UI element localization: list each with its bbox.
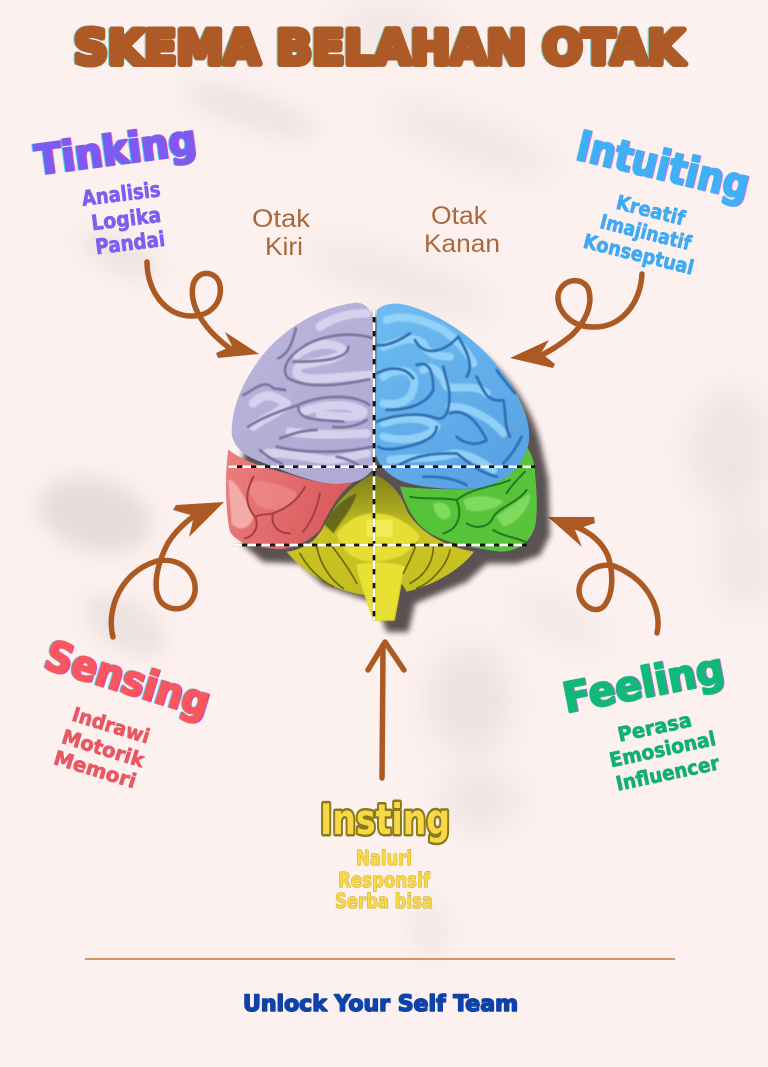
label: Otak Kanan: Otak — [431, 202, 488, 230]
list: Sensing traits: Memori — [51, 745, 139, 793]
list: Sensing traits — [51, 702, 153, 793]
list: Sensing traits: Motorik — [59, 724, 148, 772]
list: Intuiting traits: Konseptual — [581, 229, 696, 280]
heading: Feeling: Feeling — [559, 644, 728, 723]
label: Otak Kanan — [424, 202, 500, 258]
dashed division lines — [228, 308, 535, 620]
arrow: Tinking to brain — [147, 262, 259, 358]
lobe: temporal red — [226, 449, 353, 549]
title: SKEMA BELAHAN OTAK — [74, 21, 686, 76]
lobe: frontal purple — [232, 303, 374, 484]
list: Feeling traits: Perasa — [615, 708, 694, 747]
label: Otak Kiri: Otak — [252, 205, 311, 233]
heading: Tinking: Tinking — [32, 115, 199, 185]
footer text: Unlock Your Self Team — [243, 992, 518, 1017]
lobe: brainstem and cerebellum yellow — [287, 473, 474, 621]
panel: Intuiting — [572, 121, 754, 280]
heading: Insting: Insting — [320, 795, 450, 844]
label: Otak Kiri — [252, 205, 311, 261]
panel: Sensing — [39, 631, 216, 793]
list: Sensing traits: Indrawi — [69, 702, 153, 748]
list: Feeling traits — [607, 708, 722, 796]
list: Tinking traits: Pandai — [94, 227, 166, 259]
list: Insting traits: Naluri — [356, 846, 412, 870]
panel: Feeling — [559, 644, 728, 796]
arrow: Feeling to brain — [548, 517, 658, 633]
arrow: Sensing to brain — [111, 502, 224, 637]
list: Tinking traits — [80, 177, 166, 259]
list: Insting traits — [335, 846, 433, 913]
arrow: Insting to brain — [368, 642, 404, 778]
label: Otak Kiri: Kiri — [265, 233, 303, 261]
panel: Insting — [320, 795, 450, 913]
list: Feeling traits: Emosional — [607, 726, 718, 772]
label: Otak Kanan: Kanan — [424, 230, 500, 258]
lobe: frontal blue — [376, 304, 529, 489]
lobe: temporal green — [400, 447, 537, 552]
brain shadow — [240, 315, 550, 632]
brain illustration — [226, 303, 550, 632]
divider line — [85, 958, 675, 960]
heading: Sensing: Sensing — [39, 631, 216, 727]
list: Intuiting traits — [581, 190, 696, 280]
list: Feeling traits: Influencer — [614, 750, 722, 796]
arrow: Intuiting to brain — [510, 274, 642, 368]
list: Intuiting traits: Kreatif — [614, 190, 688, 230]
panel: Tinking — [32, 115, 199, 259]
list: Tinking traits: Analisis — [80, 177, 162, 211]
list: Insting traits: Responsif — [338, 868, 430, 892]
list: Insting traits: Serba bisa — [335, 889, 433, 913]
list: Tinking traits: Logika — [90, 203, 162, 235]
list: Intuiting traits: Imajinatif — [598, 209, 694, 255]
